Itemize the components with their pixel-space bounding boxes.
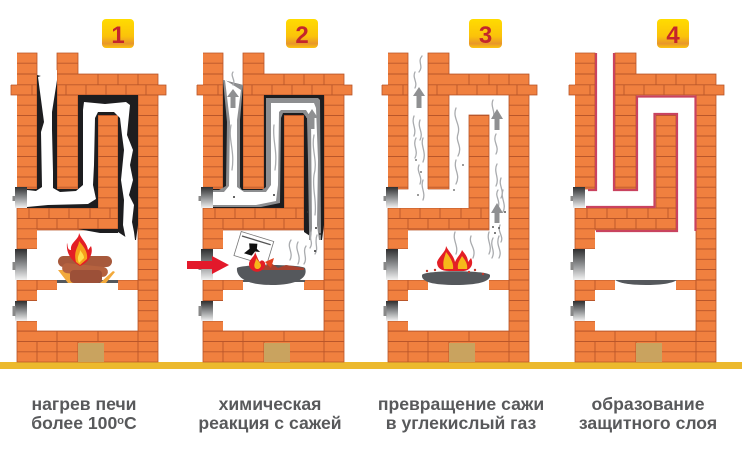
icon: red arrow	[187, 256, 229, 274]
caption 2: химическая	[219, 394, 321, 414]
fire on ash bowl	[422, 246, 490, 285]
soot layer in flue	[27, 70, 138, 240]
caption 1: С	[124, 413, 137, 433]
badge 1	[102, 19, 134, 49]
floor line	[0, 362, 742, 369]
caption 1: o	[117, 415, 124, 427]
badge 4: 4	[666, 22, 680, 49]
stove 2 brick body	[186, 53, 356, 362]
badge 2: 2	[295, 22, 309, 49]
stove 3 brick body	[371, 53, 541, 362]
arrows up	[413, 87, 503, 223]
badge 3	[469, 19, 502, 49]
badge 3: 3	[479, 22, 492, 49]
caption 1: нагрев печи	[32, 394, 136, 414]
caption 2: реакция с сажей	[198, 413, 342, 433]
soot dots and smoke	[233, 194, 321, 264]
caption 3: в углекислый газ	[386, 413, 536, 433]
stove 1 brick body	[0, 53, 170, 362]
badge 4	[657, 19, 689, 49]
caption 4: защитного слоя	[579, 413, 717, 433]
protective layer outline	[586, 53, 696, 231]
badge 2	[286, 19, 318, 49]
panel: stove 1	[0, 53, 170, 362]
chemical packet with flame on ash bowl	[234, 232, 306, 285]
caption 4: образование	[591, 394, 705, 414]
caption 1: более 100	[31, 413, 137, 433]
panel: stove 4	[558, 53, 728, 362]
empty bowl	[615, 280, 677, 285]
smoke wisps	[413, 56, 506, 258]
fire with logs	[57, 233, 118, 283]
panel: stove 3	[371, 53, 541, 362]
soot reaction layers	[213, 72, 324, 240]
arrows up	[227, 89, 318, 129]
caption 3: превращение сажи	[378, 394, 544, 414]
stove 4 brick body	[558, 53, 728, 362]
badge 1: 1	[111, 22, 125, 49]
panel: stove 2	[186, 53, 356, 362]
